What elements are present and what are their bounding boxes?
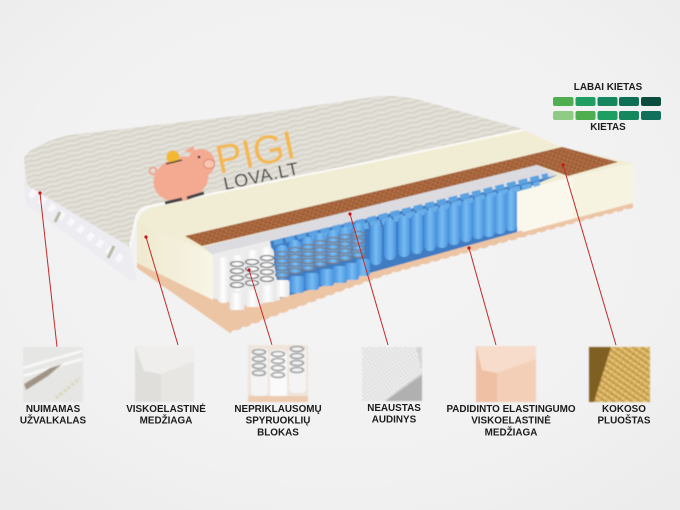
- thumbnail: zipper: [23, 347, 83, 402]
- label: SPYRUOKLIŲ: [246, 416, 310, 426]
- label: VISKOELASTINĖ: [126, 404, 206, 415]
- panel: viscoelastic foam: [126, 346, 206, 426]
- label: PADIDINTO ELASTINGUMO: [446, 404, 576, 415]
- cover side motif: [55, 212, 114, 258]
- coconut fibre layer: [185, 147, 618, 246]
- logo wordmark PIGI: PIGI: [212, 123, 299, 183]
- legend label: very firm: LABAI KIETAS: [574, 82, 643, 93]
- firmness bar: firm: [553, 111, 661, 120]
- label: KOKOSO: [602, 404, 646, 415]
- spring cavity, white section: [213, 238, 280, 306]
- cover side stitching: [30, 192, 125, 262]
- firmness legend: [553, 82, 661, 133]
- thumbnail: coconut: [589, 347, 650, 402]
- label: NEAUSTAS: [367, 403, 421, 414]
- piggy icon: [148, 146, 215, 209]
- cover trim edge: [130, 130, 523, 247]
- label: NUIMAMAS: [26, 404, 81, 415]
- thumbnail: peach foam: [476, 346, 536, 402]
- label: NEPRIKLAUSOMŲ: [234, 404, 322, 415]
- right block front face: [517, 177, 573, 232]
- label: VISKOELASTINĖ: [471, 416, 551, 426]
- panel: non-woven fabric: [362, 347, 422, 426]
- panel: high elasticity foam: [446, 346, 576, 438]
- back rows of pocket springs: [274, 176, 548, 243]
- spring cavity, blue section: [270, 175, 558, 298]
- white pocket springs: [217, 247, 290, 310]
- blue pocket springs: [370, 190, 517, 265]
- label: MEDŽIAGA: [485, 426, 537, 438]
- right foam block: [517, 163, 633, 232]
- spring-cutaway blue pockets: [276, 223, 370, 293]
- quilted top cover: [24, 96, 523, 247]
- thumbnail: springs: [248, 345, 308, 402]
- thumbnail: fabric: [362, 347, 422, 401]
- firmness bar: very firm: [553, 97, 661, 106]
- removable cover side: [24, 166, 137, 281]
- panel: coconut fibre: [589, 347, 651, 426]
- viscoelastic foam side: [137, 222, 213, 300]
- logo: [148, 123, 301, 209]
- panel: removable cover: [20, 347, 87, 426]
- panel: pocket springs: [234, 345, 322, 438]
- logo wordmark LOVA.LT: LOVA.LT: [222, 158, 301, 194]
- peach foam layer: [137, 201, 633, 333]
- callout lines: [38, 163, 616, 347]
- mattress cross-section: [24, 96, 633, 333]
- non-woven fabric strip: [203, 165, 558, 262]
- label: UŽVALKALAS: [20, 414, 87, 426]
- viscoelastic foam top: [137, 130, 633, 254]
- label: MEDŽIAGA: [140, 414, 192, 426]
- thumbnail: white foam: [135, 346, 194, 402]
- legend label: firm: KIETAS: [590, 122, 626, 133]
- label: BLOKAS: [257, 428, 299, 438]
- label: PLUOŠTAS: [597, 414, 651, 426]
- label: AUDINYS: [372, 414, 417, 426]
- scalloped peach edge: [232, 208, 633, 332]
